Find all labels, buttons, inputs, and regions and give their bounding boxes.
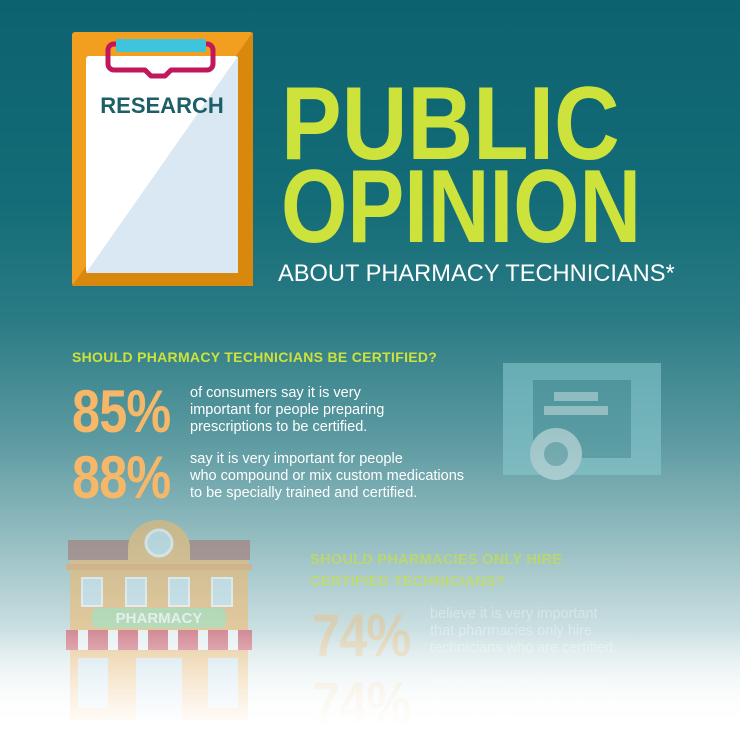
section 2 question: SHOULD PHARMACIES ONLY HIRE bbox=[310, 552, 562, 568]
clipboard icon: RESEARCH bbox=[100, 93, 224, 118]
stat 88% bbox=[72, 444, 464, 511]
stat 74% second: where technicians are required bbox=[430, 691, 628, 707]
stat 85%: prescriptions to be certified. bbox=[190, 419, 367, 435]
stat 85% bbox=[72, 378, 384, 445]
stat 74%: 74% bbox=[312, 602, 410, 669]
pharmacy building icon bbox=[66, 520, 252, 720]
stat 74%: that pharmacies only hire bbox=[430, 623, 592, 639]
stat 88%: who compound or mix custom medications bbox=[190, 468, 464, 484]
stat 74%: believe it is very important bbox=[430, 606, 598, 622]
stat 74% bbox=[312, 602, 617, 669]
stat 74% second bbox=[312, 670, 628, 737]
title bbox=[278, 66, 675, 287]
title: OPINION bbox=[281, 149, 641, 265]
section 2 question: CERTIFIED TECHNICIANS? bbox=[310, 574, 505, 590]
title: ABOUT PHARMACY TECHNICIANS* bbox=[278, 260, 675, 287]
stat 74% second: 74% bbox=[312, 670, 410, 737]
certificate icon bbox=[503, 363, 661, 480]
stat 85%: important for people preparing bbox=[190, 402, 384, 418]
section 1 question: SHOULD PHARMACY TECHNICIANS BE CERTIFIED? bbox=[72, 349, 437, 365]
stat 85%: 85% bbox=[72, 378, 170, 445]
clipboard icon bbox=[72, 32, 253, 286]
stat 74% second: would seek out a pharmacy bbox=[430, 674, 607, 690]
stat 88%: to be specially trained and certified. bbox=[190, 485, 417, 501]
stat 74% second: to be certified. bbox=[430, 708, 521, 724]
title: PUBLIC bbox=[281, 66, 620, 182]
stat 88%: say it is very important for people bbox=[190, 451, 403, 467]
stat 85%: of consumers say it is very bbox=[190, 385, 361, 401]
pharmacy building icon: PHARMACY bbox=[116, 610, 202, 627]
stat 88%: 88% bbox=[72, 444, 170, 511]
stat 74%: technicians who are certified. bbox=[430, 640, 617, 656]
section 2 question bbox=[310, 552, 562, 590]
